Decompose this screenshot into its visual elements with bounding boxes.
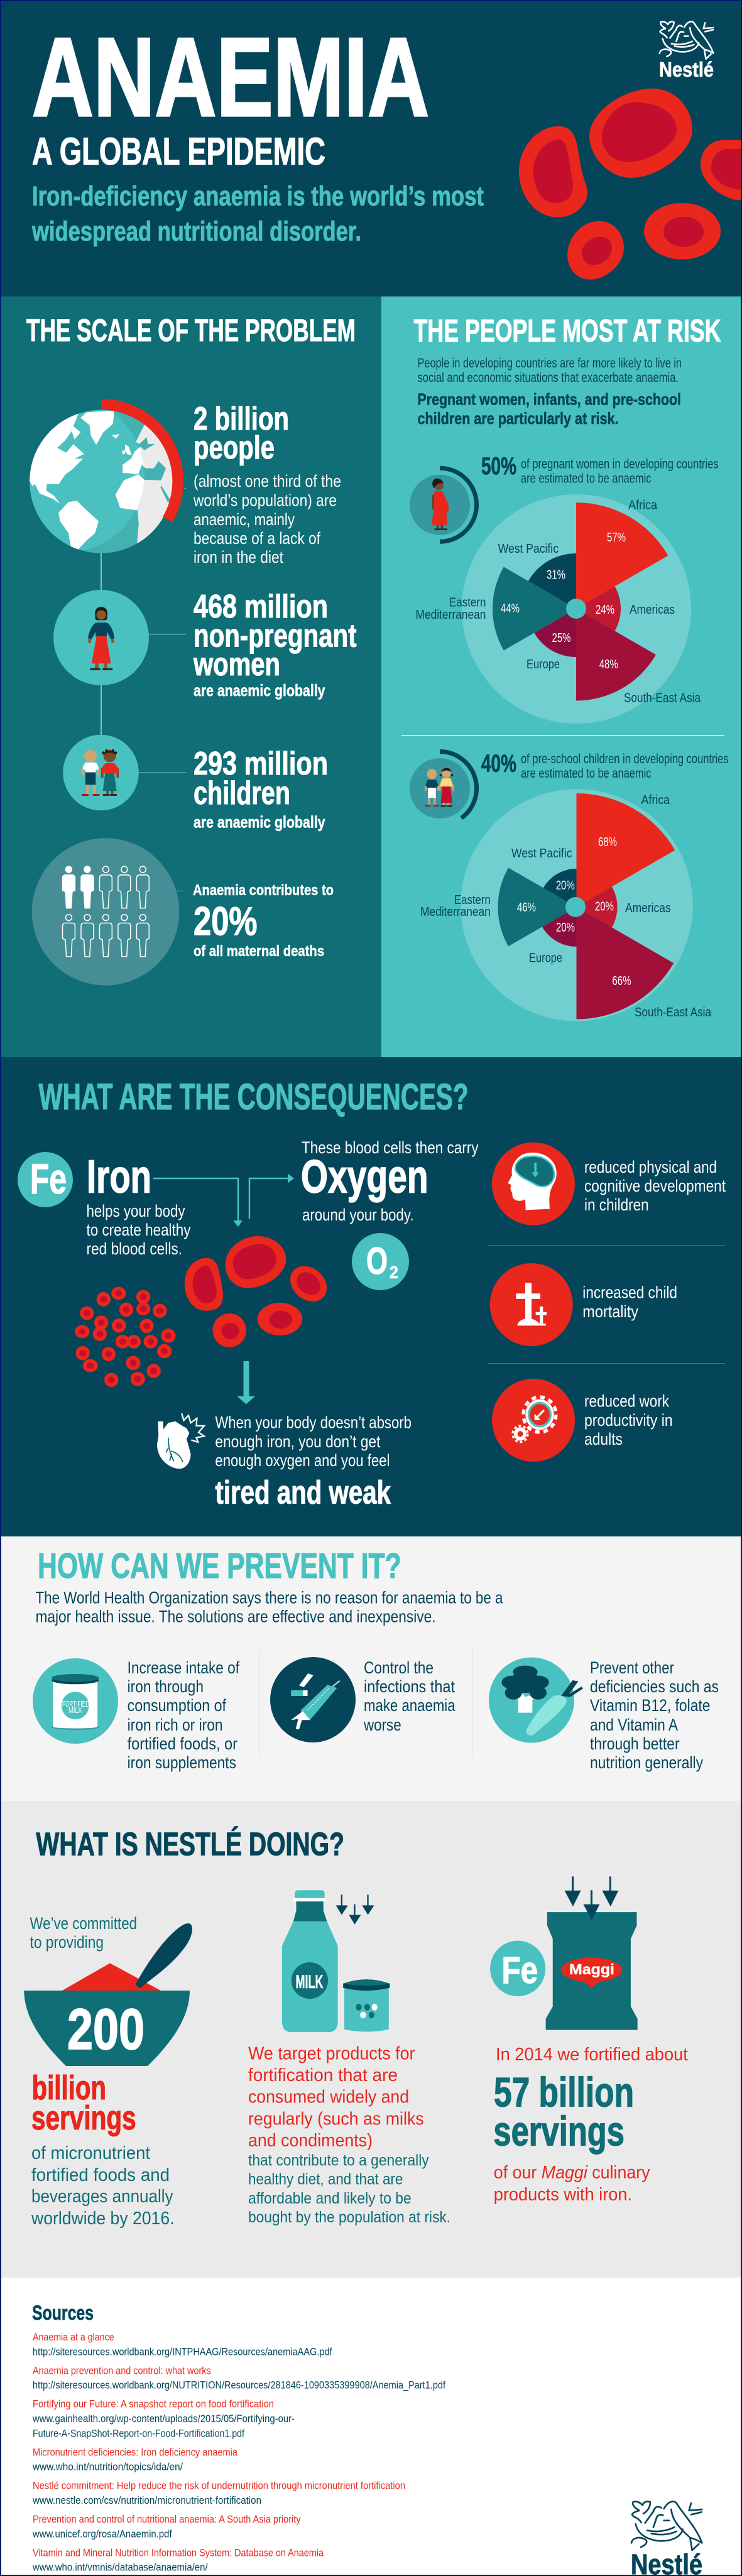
- intro statement: Iron-deficiency anaemia is the world’s most: [32, 181, 484, 212]
- chart values: 31%: [547, 568, 565, 582]
- text block: 40 percent of pre-school children: 40%: [481, 750, 516, 778]
- icon: Nestle logo top: [659, 21, 714, 81]
- text block: control infections: Control the: [364, 1658, 434, 1677]
- text block: source list: http://siteresources.worldbank.org/NUTRITION/Resources/281846-1090335399908/Anemia_Part1.pdf: [33, 2380, 445, 2391]
- text block: oxygen: [301, 1138, 479, 1224]
- text block: source list: www.unicef.org/rosa/Anaemin.pdf: [32, 2528, 172, 2540]
- text block: increase intake: consumption of: [128, 1696, 226, 1715]
- heading: what is Nestle doing: WHAT IS NESTLÉ DOING?: [36, 1827, 344, 1863]
- sector: Eastern Mediterranean 44: [493, 567, 576, 651]
- text block: source list: Future-A-SnapShot-Report-on-Food-Fortification1.pdf: [33, 2428, 244, 2439]
- sector: Europe 20: [542, 907, 577, 947]
- text block: billion servings: fortified foods and: [31, 2165, 170, 2185]
- chart labels: South-East Asia: [624, 691, 701, 705]
- chart labels: Mediterranean: [416, 608, 486, 622]
- chart labels: Africa: [628, 499, 658, 513]
- chart labels: Europe: [529, 951, 562, 965]
- text block: source list: www.who.int/nutrition/topics/ida/en/: [32, 2462, 183, 2473]
- text block: billion servings: beverages annually: [31, 2187, 173, 2207]
- connector lines: [101, 489, 186, 891]
- text block: 50 percent of pregnant women: [481, 453, 719, 486]
- text block: child mortality: increased child: [582, 1283, 677, 1302]
- text block: tired and weak: [215, 1413, 412, 1511]
- text block: 468 million non-pregnant women: women: [193, 646, 280, 683]
- text block: child mortality: [582, 1283, 677, 1321]
- chart labels: Eastern: [454, 893, 491, 907]
- text block: committed: [30, 1914, 137, 1952]
- icon: O2 circle: O: [366, 1240, 388, 1282]
- icon: O2 circle: [352, 1233, 409, 1290]
- text block: control infections: infections that: [364, 1677, 455, 1696]
- icon: milk bottle, jar and arrows: [282, 1890, 390, 2032]
- icon: pregnant woman with 50 percent arc: [410, 468, 477, 541]
- heading: the scale of the problem: THE SCALE OF THE PROBLEM: [26, 313, 356, 348]
- sector: Africa 68: [577, 793, 675, 907]
- sector: West Pacific 31: [528, 553, 576, 609]
- text block: 2 billion people: 2 billion: [194, 401, 289, 437]
- text block: we target products: consumed widely and: [248, 2087, 409, 2107]
- text block: increase intake: fortified foods, or: [128, 1734, 237, 1753]
- text block: prevent deficiencies: nutrition generally: [590, 1753, 703, 1772]
- text block: risk intro: Pregnant women, infants, and pre-school: [417, 389, 681, 408]
- icon: heart: [157, 1413, 204, 1469]
- panel: header background: [0, 0, 742, 296]
- intro statement: [31, 181, 484, 247]
- panel: sources background: [0, 2278, 742, 2576]
- chart labels: Europe: [526, 658, 560, 671]
- text block: we target products: [248, 2044, 450, 2226]
- text block: 468 million non-pregnant women: non-pregnant: [194, 618, 357, 655]
- text block: source list: Nestlé commitment: Help reduce the risk of undernutrition through micronutrient fortification: [33, 2481, 405, 2492]
- heading: sources: Sources: [32, 2302, 94, 2324]
- text block: 2 billion people: [193, 401, 341, 567]
- text block: increase intake: Increase intake of: [128, 1658, 239, 1677]
- text block: 57 billion servings: 57 billion: [494, 2069, 634, 2116]
- text block: 20% of maternal deaths: Anaemia contributes to: [193, 882, 334, 899]
- text block: control infections: make anaemia: [364, 1696, 456, 1715]
- text block: tired and weak: tired and weak: [215, 1475, 391, 1511]
- panel: prevention background: [0, 1536, 742, 1801]
- text block: prevent deficiencies: through better: [590, 1734, 680, 1753]
- icon: small anaemic red blood cells: [75, 1287, 175, 1387]
- text block: work productivity: [584, 1392, 673, 1448]
- text block: 57 billion servings: [493, 2045, 688, 2205]
- icon: children with 40 percent arc: [410, 751, 476, 818]
- text block: 468 million non-pregnant women: are anaemic globally: [194, 681, 325, 700]
- text block: risk intro: social and economic situations that exacerbate anaemia.: [417, 371, 679, 385]
- chart values: 44%: [501, 602, 520, 616]
- chart values: [517, 835, 631, 988]
- sector: West Pacific 20: [543, 869, 577, 907]
- icon: graves circle: [490, 1263, 573, 1346]
- title: ANAEMIA: [32, 14, 429, 139]
- sector: Eastern Mediterranean 46: [498, 868, 577, 946]
- text block: reduced development: in children: [584, 1195, 649, 1214]
- text block: committed: to providing: [30, 1933, 104, 1952]
- text block: risk intro: children are particularly at risk.: [417, 409, 618, 428]
- text block: iron: to create healthy: [87, 1220, 191, 1239]
- text block: 468 million non-pregnant women: [193, 589, 357, 700]
- text block: billion servings: of micronutrient: [31, 2143, 150, 2163]
- text block: 57 billion servings: In 2014 we fortified about: [496, 2045, 688, 2065]
- icon: 2 of 10 people pictogram: [32, 838, 179, 986]
- text block: risk intro: [417, 356, 682, 428]
- icon: Fe circle and Maggi pack: Maggi: [569, 1961, 614, 1977]
- text block: tired and weak: enough oxygen and you feel: [215, 1451, 390, 1470]
- text block: 50 percent of pregnant women: 50%: [481, 453, 516, 480]
- icon: milk bottle, jar and arrows: MILK: [295, 1972, 324, 1992]
- panel: Nestle actions background: [0, 1801, 742, 2278]
- text block: reduced development: reduced physical and: [584, 1158, 717, 1177]
- icon: bowl with spoon and 200: [24, 1923, 192, 2066]
- text block: WHO statement: The World Health Organization says there is no reason for anaemia to be a: [35, 1588, 503, 1607]
- icon: healthy red blood cells: [185, 1236, 333, 1347]
- icon: Nestle logo top: Nestlé: [659, 58, 714, 81]
- text block: 2 billion people: people: [194, 430, 275, 466]
- text block: 20% of maternal deaths: 20%: [194, 898, 258, 943]
- text block: child mortality: mortality: [582, 1302, 638, 1321]
- chart values: [501, 531, 626, 671]
- text block: 2 billion people: anaemic, mainly: [194, 510, 295, 529]
- text block: prevent deficiencies: Prevent other: [590, 1658, 674, 1677]
- heading: how can we prevent it: HOW CAN WE PREVENT IT?: [38, 1546, 401, 1586]
- icon: Fe circle and Maggi pack: [490, 1876, 638, 2030]
- chart values: 20%: [556, 921, 575, 935]
- icon: globe with one third arc: [30, 399, 183, 553]
- text block: iron: helps your body: [87, 1202, 185, 1220]
- icon: header red blood cells: [519, 89, 742, 280]
- text block: oxygen: around your body.: [302, 1205, 413, 1224]
- text block: 293 million children: 293 million: [194, 746, 328, 782]
- text block: 2 billion people: iron in the diet: [194, 548, 283, 567]
- text block: 293 million children: are anaemic globally: [194, 813, 325, 832]
- text block: tired and weak: When your body doesn’t absorb: [215, 1413, 412, 1432]
- icon: children in circle: [63, 735, 139, 810]
- arrow: iron to cells: [153, 1178, 243, 1227]
- text block: 2 billion people: (almost one third of the: [194, 472, 341, 491]
- text block: we target products: and condiments): [248, 2131, 373, 2151]
- chart labels: Eastern: [449, 595, 486, 609]
- text block: iron: Iron: [87, 1151, 151, 1202]
- text block: source list: Anaemia prevention and control: what works: [33, 2365, 211, 2376]
- icon: fortified milk can: MILK: [68, 1705, 82, 1715]
- panel: scale of the problem background: [0, 296, 381, 1057]
- text block: committed: We’ve committed: [30, 1914, 137, 1933]
- sector: South-East Asia 48: [576, 609, 656, 701]
- text block: increase intake: [128, 1658, 239, 1772]
- sector: Americas 24: [576, 587, 621, 631]
- icon: broccoli and carrot: [489, 1657, 583, 1742]
- text block: 57 billion servings: products with iron.: [494, 2185, 632, 2205]
- heading: what are the consequences: WHAT ARE THE CONSEQUENCES?: [39, 1077, 469, 1117]
- text block: oxygen: Oxygen: [301, 1151, 428, 1202]
- chart labels: South-East Asia: [635, 1006, 712, 1019]
- chart labels: West Pacific: [498, 542, 559, 556]
- intro statement: widespread nutritional disorder.: [31, 216, 361, 247]
- text block: iron: red blood cells.: [87, 1239, 182, 1258]
- chart values: 25%: [552, 631, 571, 645]
- text block: 57 billion servings: of our Maggi culinary: [494, 2163, 650, 2183]
- chart labels: Africa: [641, 793, 670, 807]
- icon: syringe and pills: [270, 1657, 356, 1742]
- text block: billion servings: worldwide by 2016.: [31, 2209, 174, 2229]
- text block: we target products: regularly (such as milks: [248, 2109, 424, 2129]
- text block: source list: Micronutrient deficiencies: Iron deficiency anaemia: [33, 2447, 238, 2458]
- icon: fortified milk can: FORTIFIED: [62, 1699, 89, 1709]
- text block: we target products: bought by the population at risk.: [248, 2209, 450, 2226]
- text block: 468 million non-pregnant women: 468 million: [194, 589, 328, 625]
- text block: source list: Anaemia at a glance: [33, 2332, 114, 2343]
- icon: O2 circle: 2: [390, 1263, 398, 1282]
- text block: billion servings: billion: [31, 2069, 106, 2107]
- text block: iron: [87, 1151, 191, 1258]
- text block: source list: http://siteresources.worldbank.org/INTPHAAG/Resources/anemiaAAG.pdf: [33, 2346, 332, 2357]
- text block: 57 billion servings: servings: [493, 2108, 625, 2155]
- text block: source list: [32, 2332, 445, 2573]
- text block: 293 million children: children: [194, 775, 290, 812]
- chart labels: [416, 499, 701, 705]
- chart values: 66%: [612, 974, 631, 988]
- text block: control infections: [363, 1658, 456, 1734]
- text block: source list: www.gainhealth.org/wp-content/uploads/2015/05/Fortifying-our-: [32, 2413, 295, 2425]
- sector: Europe 25: [534, 609, 576, 657]
- text block: work productivity: reduced work: [584, 1392, 669, 1411]
- icon: fortified milk can: [33, 1658, 118, 1744]
- icon: gears circle: [492, 1379, 575, 1462]
- text block: prevent deficiencies: and Vitamin A: [590, 1715, 678, 1734]
- text block: reduced development: [584, 1158, 726, 1214]
- text block: increase intake: iron rich or iron: [128, 1715, 223, 1734]
- text block: work productivity: adults: [584, 1430, 623, 1448]
- text block: WHO statement: major health issue. The solutions are effective and inexpensive.: [35, 1607, 436, 1626]
- sector: Africa 57: [576, 503, 668, 609]
- icon: Fe circle: Fe: [30, 1155, 67, 1203]
- chart: pre-school children polar area: [420, 789, 712, 1021]
- text block: WHO statement: [35, 1588, 503, 1626]
- text block: 40 percent of pre-school children: [481, 750, 729, 781]
- icon: brain circle: [492, 1143, 575, 1226]
- text block: 293 million children: [194, 746, 328, 832]
- sector: South-East Asia 66: [577, 907, 674, 1019]
- chart values: 24%: [596, 603, 614, 617]
- text block: source list: Fortifying our Future: A snapshot report on food fortification: [33, 2399, 274, 2410]
- arrow: cells to oxygen: [249, 1173, 294, 1219]
- chart values: 57%: [607, 531, 626, 545]
- chart values: 48%: [599, 658, 618, 671]
- text block: 20% of maternal deaths: of all maternal deaths: [194, 943, 324, 960]
- text block: source list: www.who.int/vmnis/database/anaemia/en/: [32, 2562, 208, 2573]
- chart labels: Americas: [625, 901, 671, 915]
- chart values: 46%: [517, 901, 536, 915]
- text block: 20% of maternal deaths: [193, 882, 334, 960]
- sector: Americas 20: [577, 887, 618, 927]
- panel: consequences background: [0, 1057, 742, 1536]
- chart labels: West Pacific: [511, 847, 572, 861]
- icon: Nestle logo bottom: [631, 2501, 702, 2576]
- text block: we target products: affordable and likely to be: [248, 2190, 412, 2207]
- chart values: 68%: [598, 835, 617, 849]
- text block: control infections: worse: [363, 1715, 401, 1734]
- text block: increase intake: iron supplements: [128, 1753, 236, 1772]
- chart labels: [420, 793, 712, 1019]
- icon: bowl with spoon and 200: 200: [67, 1997, 145, 2062]
- text block: tired and weak: enough iron, you don’t get: [215, 1432, 381, 1451]
- text block: source list: www.nestle.com/csv/nutrition/micronutrient-fortification: [32, 2495, 261, 2506]
- text block: oxygen: These blood cells then carry: [302, 1138, 479, 1157]
- text block: increase intake: iron through: [128, 1677, 204, 1696]
- text block: prevent deficiencies: Vitamin B12, folate: [590, 1696, 710, 1715]
- text block: 40 percent of pre-school children: are estimated to be anaemic: [521, 766, 651, 781]
- text block: 2 billion people: because of a lack of: [194, 529, 320, 548]
- text block: billion servings: servings: [31, 2099, 136, 2137]
- text block: we target products: healthy diet, and that are: [248, 2171, 403, 2188]
- text block: we target products: We target products for: [248, 2044, 415, 2064]
- text block: source list: Prevention and control of nutritional anaemia: A South Asia priority: [33, 2514, 301, 2525]
- chart values: 20%: [595, 899, 614, 913]
- text block: prevent deficiencies: deficiencies such as: [590, 1677, 719, 1696]
- text block: we target products: that contribute to a generally: [248, 2152, 429, 2170]
- text block: billion servings: [31, 2069, 174, 2229]
- chart labels: Mediterranean: [420, 905, 491, 919]
- subtitle: A GLOBAL EPIDEMIC: [32, 130, 325, 173]
- text block: we target products: fortification that are: [248, 2065, 398, 2085]
- chart values: 20%: [556, 879, 575, 893]
- arrow: big down: [237, 1361, 255, 1405]
- text block: work productivity: productivity in: [584, 1411, 673, 1430]
- chart: pregnant women polar area: [416, 494, 701, 724]
- chart labels: Americas: [630, 603, 675, 617]
- text block: source list: Vitamin and Mineral Nutrition Information System: Database on Anaemia: [33, 2547, 324, 2558]
- icon: Fe circle and Maggi pack: Fe: [501, 1949, 538, 1991]
- text block: 50 percent of pregnant women: are estimated to be anaemic: [521, 471, 651, 486]
- text block: prevent deficiencies: [590, 1658, 719, 1772]
- panel: people most at risk background: [381, 296, 742, 1057]
- icon: Fe circle: [18, 1152, 73, 1207]
- icon: woman in circle: [53, 590, 149, 685]
- text block: 2 billion people: world’s population) are: [193, 491, 337, 510]
